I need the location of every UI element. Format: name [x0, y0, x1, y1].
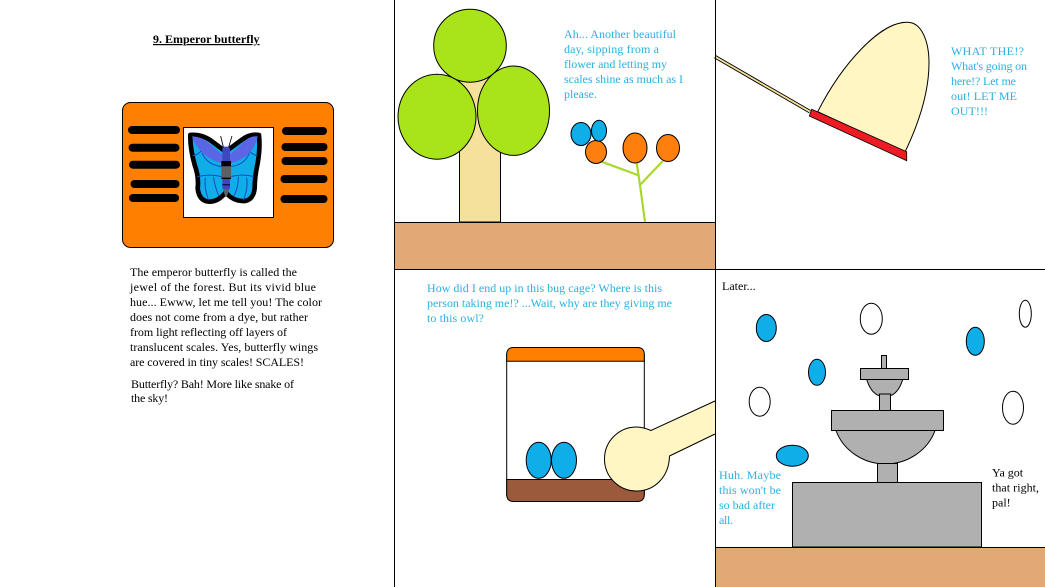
- body text: The emperor butterfly is called the: [130, 265, 297, 279]
- closing remark: Butterfly? Bah! More like snake of: [131, 377, 294, 391]
- panel: tree and flower: [395, 9, 715, 269]
- net rim: [809, 109, 907, 161]
- speech text: What's going on: [951, 59, 1027, 73]
- net handle: [715, 57, 810, 112]
- body text: are covered in tiny scales! SCALES!: [130, 355, 304, 369]
- body text: jewel of the forest. But its vivid blue: [129, 280, 316, 294]
- tree: [398, 9, 550, 222]
- hand and arm: [604, 401, 715, 491]
- butterfly card: [122, 102, 334, 248]
- net handle core: [715, 57, 810, 112]
- flower blossoms: [586, 133, 680, 164]
- cage: [507, 348, 644, 502]
- icon: butterfly: [190, 135, 259, 202]
- title: 9. Emperor butterfly: [153, 32, 260, 46]
- speech text: to this owl?: [427, 311, 484, 325]
- speech text: OUT!!!: [951, 104, 988, 118]
- panel: fountain: [716, 279, 1045, 587]
- body text: translucent scales. Yes, butterfly wings: [130, 340, 318, 354]
- speech text: reply: Ya got: [992, 466, 1024, 480]
- speech text: butterfly: Huh. Maybe: [719, 468, 781, 482]
- flower stems: [602, 161, 663, 222]
- body text: hue... Ewww, let me tell you! The color: [130, 295, 322, 309]
- closing remark: the sky!: [131, 391, 168, 405]
- panel: bug cage: [427, 281, 715, 502]
- speech text: flower and letting my: [564, 57, 667, 71]
- speech text: scales shine as much as I: [564, 72, 683, 86]
- blue butterflies: [756, 314, 984, 466]
- speech text: here!? Let me: [951, 74, 1016, 88]
- fountain: [792, 356, 982, 547]
- speech text: out! LET ME: [951, 89, 1017, 103]
- panel: net: [715, 22, 1030, 161]
- speech text: Ah... Another beautiful: [564, 27, 677, 41]
- speech text: butterfly: so bad after: [719, 498, 775, 512]
- speech text: reply: that right,: [992, 480, 1039, 494]
- speech text: day, sipping from a: [564, 42, 660, 56]
- speech text: please.: [564, 87, 597, 101]
- butterfly wings: [571, 120, 606, 146]
- panel: intro column: [122, 32, 334, 405]
- body text: does not come from a dye, but rather: [130, 310, 308, 324]
- speech text: butterfly: this won't be: [719, 483, 781, 497]
- net bag: [818, 22, 929, 152]
- white butterflies: [749, 300, 1031, 424]
- ground: [716, 547, 1045, 587]
- ground: [395, 222, 715, 269]
- caption: Later...: [722, 279, 756, 293]
- speech text: reply: pal!: [992, 496, 1011, 510]
- body text: from light reflecting off layers of: [130, 325, 287, 339]
- speech text: How did I end up in this bug cage? Where is this: [427, 281, 662, 295]
- speech text: butterfly: all.: [719, 513, 733, 527]
- speech text: person taking me!? ...Wait, why are they giving me: [427, 296, 672, 310]
- speech text: WHAT THE!?: [951, 44, 1024, 58]
